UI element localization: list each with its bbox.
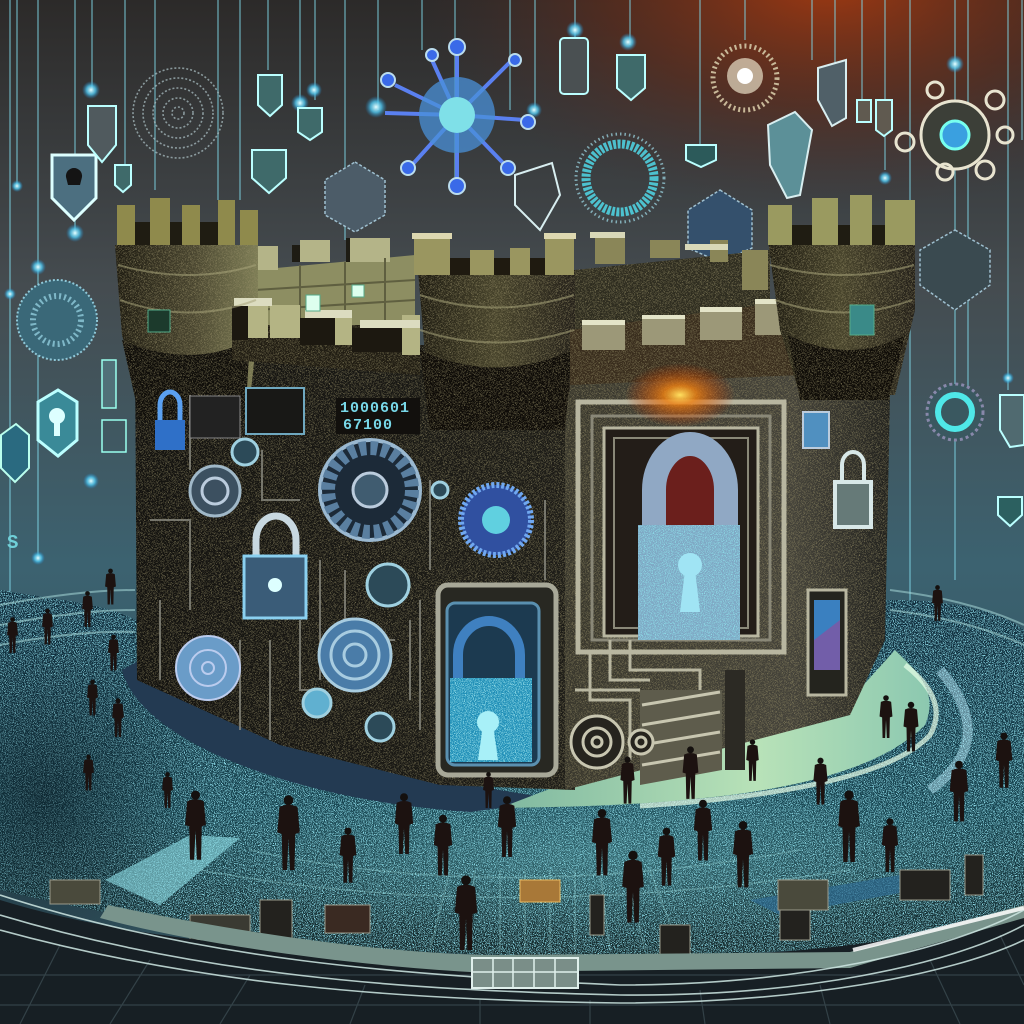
floor: [0, 900, 1024, 1024]
icon: dotted blue sphere: [17, 280, 97, 360]
small blue padlock: [155, 392, 185, 450]
tower ring lines: [118, 265, 914, 342]
middle tower: [412, 233, 576, 430]
icon: white gear network: [896, 82, 1013, 180]
figures: [7, 569, 1012, 950]
far terraces: [0, 590, 1024, 645]
icon: hexagon network: [325, 162, 990, 310]
icon: orange and white spark ring: [713, 46, 777, 110]
orange glow: [625, 363, 735, 427]
binary code readout: 1000601: [340, 400, 410, 417]
lower wall merlons: [232, 298, 420, 375]
binary code readout: [336, 398, 420, 434]
icon: teal spark gear: [927, 384, 983, 440]
floor steps: [472, 958, 578, 988]
icon: shield left top: [52, 155, 96, 220]
ground plane: [0, 590, 1024, 970]
left wall: circuit traces: [150, 395, 545, 740]
glowing line beads: [4, 21, 1014, 565]
right lower merlons: [570, 299, 800, 385]
shutter door: [640, 670, 745, 785]
right upper wall: [575, 232, 770, 365]
large padlock: [638, 444, 740, 640]
icon: small hanging shields: [88, 38, 1024, 526]
plinth: blue walkway: [122, 660, 560, 812]
icon: cyan shield lock: [1, 390, 77, 482]
icon: blue starburst: [381, 39, 535, 194]
icon: dotted circle: [133, 68, 223, 158]
dial: left lower: [176, 636, 240, 700]
bottom door with padlock: [438, 585, 556, 775]
binary code readout: 67100: [343, 417, 393, 434]
dial: blue glowing: [461, 485, 531, 555]
ground data rows: [200, 850, 850, 950]
upper wall battlement: [255, 238, 415, 350]
right small padlock: [835, 452, 871, 527]
swirl medallions: [571, 716, 653, 768]
plinth: green walkway: [500, 650, 930, 808]
castle: [115, 195, 915, 790]
right tower: [768, 195, 915, 400]
left tower: [115, 198, 258, 420]
icon: crystal cubes: [515, 60, 846, 230]
icon: cyan dotted ring: [576, 134, 664, 222]
label: stray letter: S: [7, 532, 18, 554]
dial: small rings: [232, 439, 448, 741]
dial: left: [190, 466, 240, 516]
tower and wall window tags: [148, 285, 874, 335]
castle left wall: [135, 345, 575, 790]
curb edge lines: [0, 895, 1024, 1003]
circuit machinery: [50, 855, 983, 961]
big dial: [320, 440, 420, 540]
right side screen: [808, 590, 846, 695]
castle right wall: [565, 345, 890, 790]
left padlock: [244, 516, 306, 618]
right panel: concentric circuit frame: [575, 402, 784, 760]
light curb band: [100, 905, 1024, 972]
hanging data lines: [10, 0, 1022, 640]
plinth ring highlight: [640, 665, 968, 806]
dial: lower concentric: [319, 619, 391, 691]
screen: dark display: [190, 388, 304, 438]
right wall small screen: [803, 412, 829, 448]
icon: cyan small hex: [102, 360, 126, 452]
